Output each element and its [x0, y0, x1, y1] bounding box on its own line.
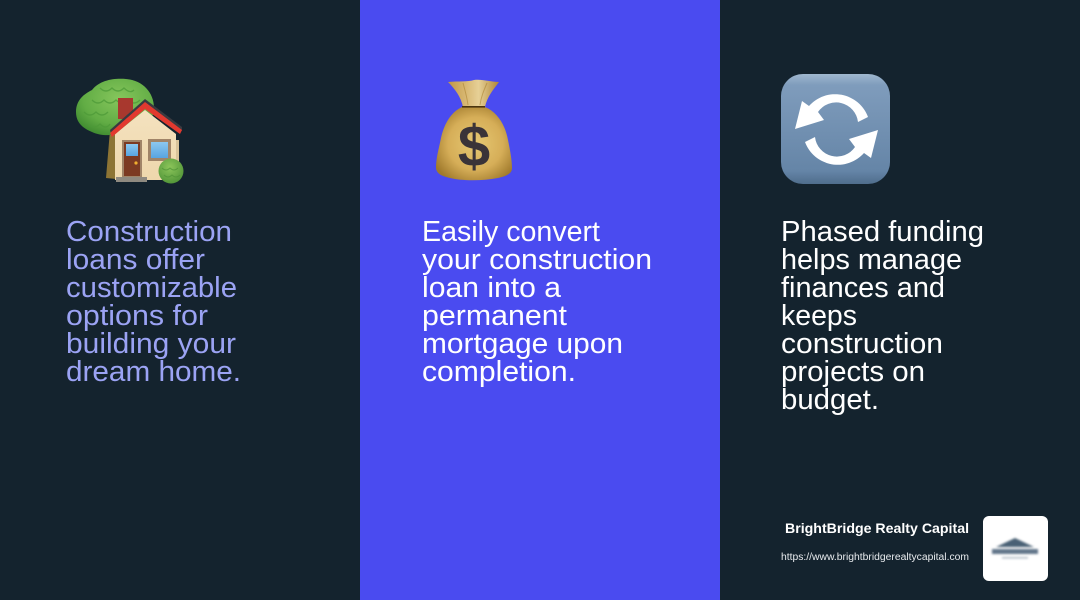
text: left panel copy	[66, 216, 241, 388]
text: left panel copy: dream home.	[66, 356, 241, 388]
text: left panel copy: Construction	[66, 216, 232, 248]
text: centre panel copy: permanent	[422, 300, 567, 332]
brand url: https://www.brightbridgerealtycapital.com	[781, 552, 969, 563]
text: right panel copy: helps manage	[781, 244, 962, 276]
text: centre panel copy: completion.	[422, 356, 576, 388]
text: left panel copy: customizable	[66, 272, 237, 304]
text: centre panel copy: your construction	[422, 244, 652, 276]
icon: house with tree	[76, 79, 184, 184]
text: right panel copy: keeps	[781, 300, 857, 332]
icon: money bag	[436, 80, 512, 180]
text: centre panel copy: loan into a	[422, 272, 562, 304]
icon: refresh arrows tile	[781, 74, 890, 184]
text: right panel copy: construction	[781, 328, 943, 360]
text: right panel copy: budget.	[781, 384, 879, 416]
text: centre panel copy	[422, 216, 652, 388]
text: left panel copy: building your	[66, 328, 236, 360]
logo tile	[983, 516, 1048, 581]
panel: centre background	[360, 0, 720, 600]
text: right panel copy	[781, 216, 984, 416]
text: centre panel copy: mortgage upon	[422, 328, 623, 360]
text: left panel copy: options for	[66, 300, 208, 332]
panel: right background	[720, 0, 1080, 600]
icon glyph: dollar sign: $	[458, 114, 490, 179]
text: centre panel copy: Easily convert	[422, 216, 600, 248]
panel: left background	[0, 0, 360, 600]
text: right panel copy: Phased funding	[781, 216, 984, 248]
text: right panel copy: finances and	[781, 272, 945, 304]
text: left panel copy: loans offer	[66, 244, 205, 276]
text: right panel copy: projects on	[781, 356, 925, 388]
brand name: BrightBridge Realty Capital	[785, 520, 969, 536]
